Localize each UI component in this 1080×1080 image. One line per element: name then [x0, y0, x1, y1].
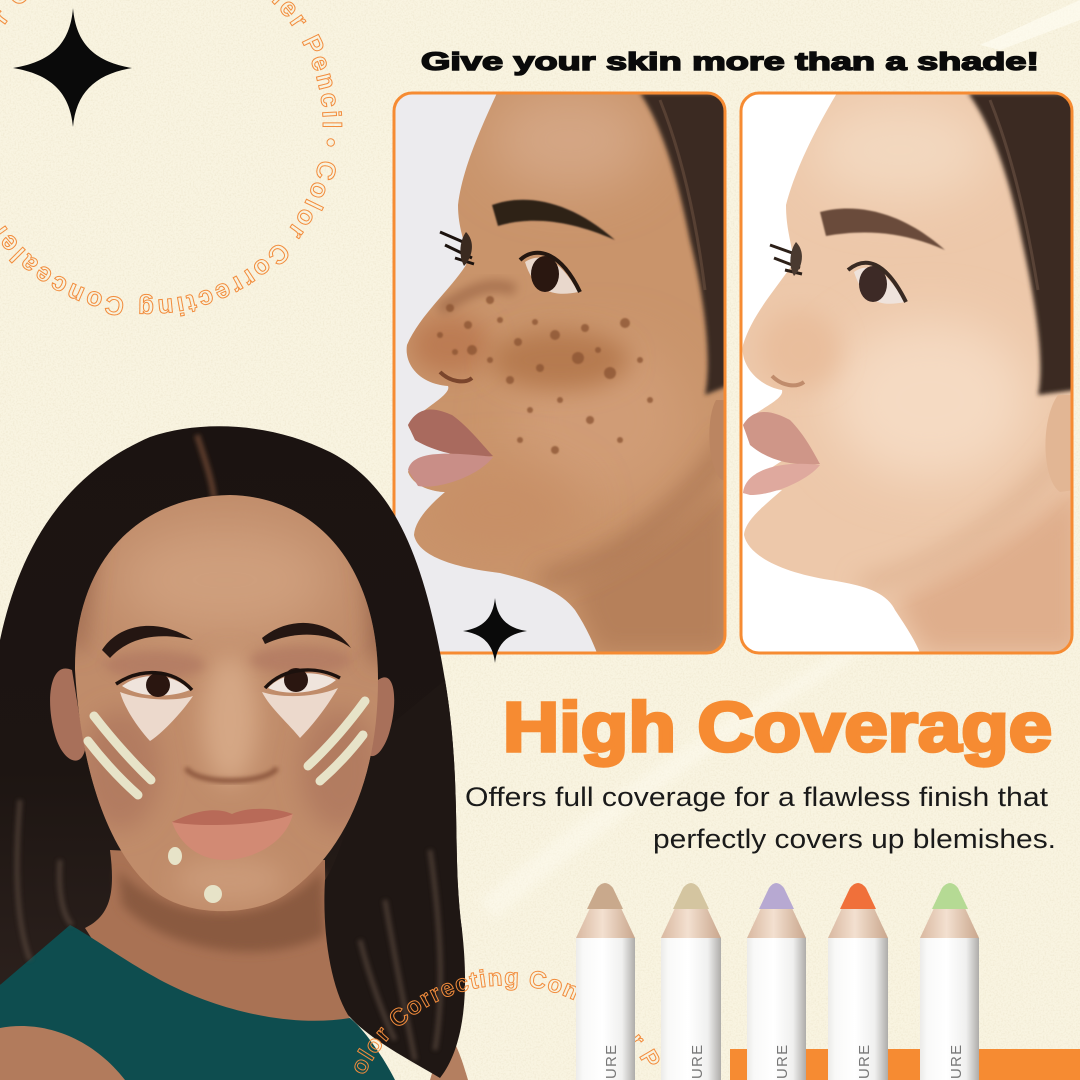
eye [770, 242, 906, 304]
hair [640, 93, 730, 395]
concealer stripes [88, 701, 365, 795]
face [75, 495, 378, 912]
eyes [116, 668, 340, 697]
neck [85, 850, 352, 1030]
right arm [430, 1030, 468, 1080]
body text: Offers full coverage for a flawless finish that [465, 782, 1049, 812]
body text: perfectly covers up blemishes. [653, 824, 1056, 854]
icon: large black star [13, 8, 132, 127]
pencil: green [920, 883, 979, 1080]
panel: before photo [394, 90, 734, 653]
pencil: orange [828, 883, 888, 1080]
under eye concealer [120, 692, 193, 741]
freckles [437, 296, 653, 454]
eyebrows [102, 626, 193, 658]
top: green dress [0, 925, 395, 1080]
hair part [197, 435, 214, 498]
orange bar [730, 1049, 1080, 1080]
lips [408, 409, 493, 457]
eye [440, 232, 580, 294]
pencil: orange: URE [856, 1044, 873, 1079]
body text [465, 782, 1056, 854]
eyebrow [820, 209, 945, 250]
nostril [440, 372, 472, 381]
circular text: lower ring: olor Correcting Concealer P [354, 968, 660, 1074]
face: freckled skin [394, 90, 734, 653]
arm [0, 1026, 125, 1080]
pencil: lavender: URE [774, 1044, 791, 1079]
ear [1046, 395, 1070, 492]
nostril [772, 376, 804, 385]
heading: high coverage: High Coverage [503, 688, 1052, 766]
face: smooth skin [741, 93, 1080, 653]
nose [186, 768, 277, 781]
icon: small black star [463, 598, 527, 663]
ears [50, 668, 85, 761]
hair [0, 426, 462, 1000]
pencil: lavender [747, 883, 806, 1080]
lips [743, 412, 820, 464]
pencil: beige [576, 883, 635, 1080]
heading: give your skin: Give your skin more than a shade! [421, 48, 1039, 76]
hair [968, 93, 1076, 395]
pencil: beige: URE [603, 1044, 620, 1079]
hair highlights [17, 800, 440, 1060]
pencil: khaki [661, 883, 721, 1080]
chin concealer dots [168, 847, 222, 903]
pencil: green: URE [948, 1044, 965, 1079]
pencil: khaki: URE [689, 1044, 706, 1079]
panel: after photo [741, 93, 1080, 653]
product: five concealer pencils [576, 883, 979, 1080]
eyebrow [492, 200, 615, 240]
model portrait [0, 426, 468, 1080]
hair lock right [324, 680, 465, 1078]
ear [710, 400, 724, 444]
lips [172, 809, 293, 826]
